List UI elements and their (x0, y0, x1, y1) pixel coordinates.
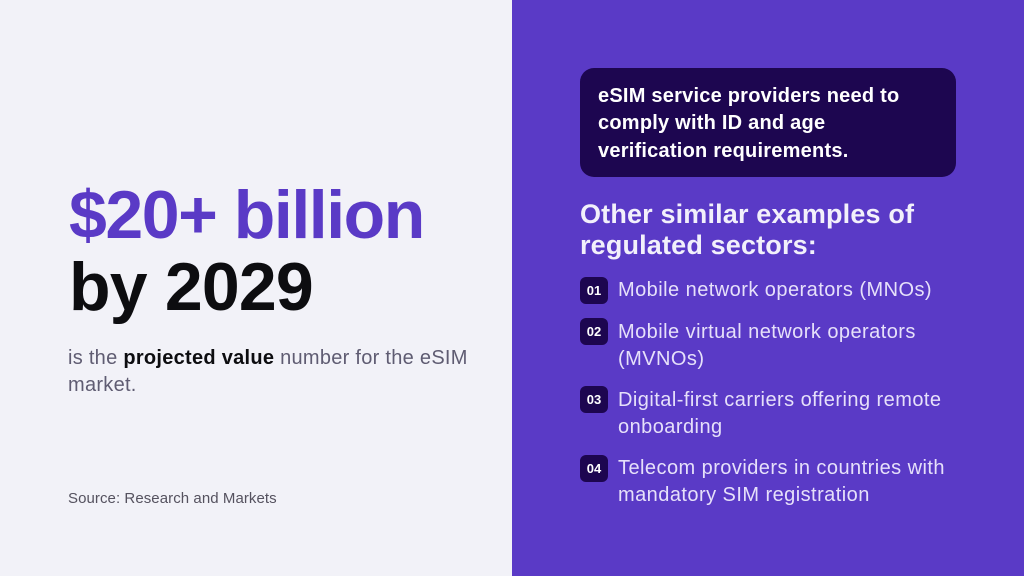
text 04: Telecom providers in countries with (618, 457, 945, 479)
text 03: onboarding (618, 416, 723, 438)
text: description: market. (68, 374, 137, 396)
subheading: regulated sectors: (580, 230, 817, 260)
subheading (580, 199, 914, 260)
callout text: comply with ID and age (598, 112, 825, 134)
text 04: mandatory SIM registration (618, 484, 870, 506)
badge 04: 04 (587, 461, 601, 476)
text: description (68, 347, 468, 396)
panel: left (0, 0, 512, 576)
heading: year: by 2029 (69, 249, 313, 325)
callout text (598, 84, 899, 162)
badge 04 (580, 455, 608, 482)
text 04 (618, 457, 945, 506)
callout text: eSIM service providers need to (598, 84, 899, 106)
text 03 (618, 389, 942, 438)
text: source: Source: Research and Markets (68, 490, 277, 507)
panel: right (512, 0, 1024, 576)
text 03: Digital-first carriers offering remote (618, 389, 942, 411)
subheading: Other similar examples of (580, 199, 914, 229)
text 02: (MVNOs) (618, 348, 704, 370)
callout text: verification requirements. (598, 140, 849, 162)
badge 03 (580, 386, 608, 413)
text 02 (618, 321, 916, 370)
heading: value: $20+ billion (69, 177, 424, 253)
badge 01 (580, 277, 608, 304)
badge 03: 03 (587, 392, 601, 407)
badge 02 (580, 318, 608, 345)
text: description: is the projected value number for the eSIM (68, 347, 468, 369)
badge 02: 02 (587, 324, 601, 339)
text 02: Mobile virtual network operators (618, 321, 916, 343)
callout (580, 68, 956, 177)
badge 01: 01 (587, 283, 601, 298)
text 01: Mobile network operators (MNOs) (618, 279, 932, 301)
